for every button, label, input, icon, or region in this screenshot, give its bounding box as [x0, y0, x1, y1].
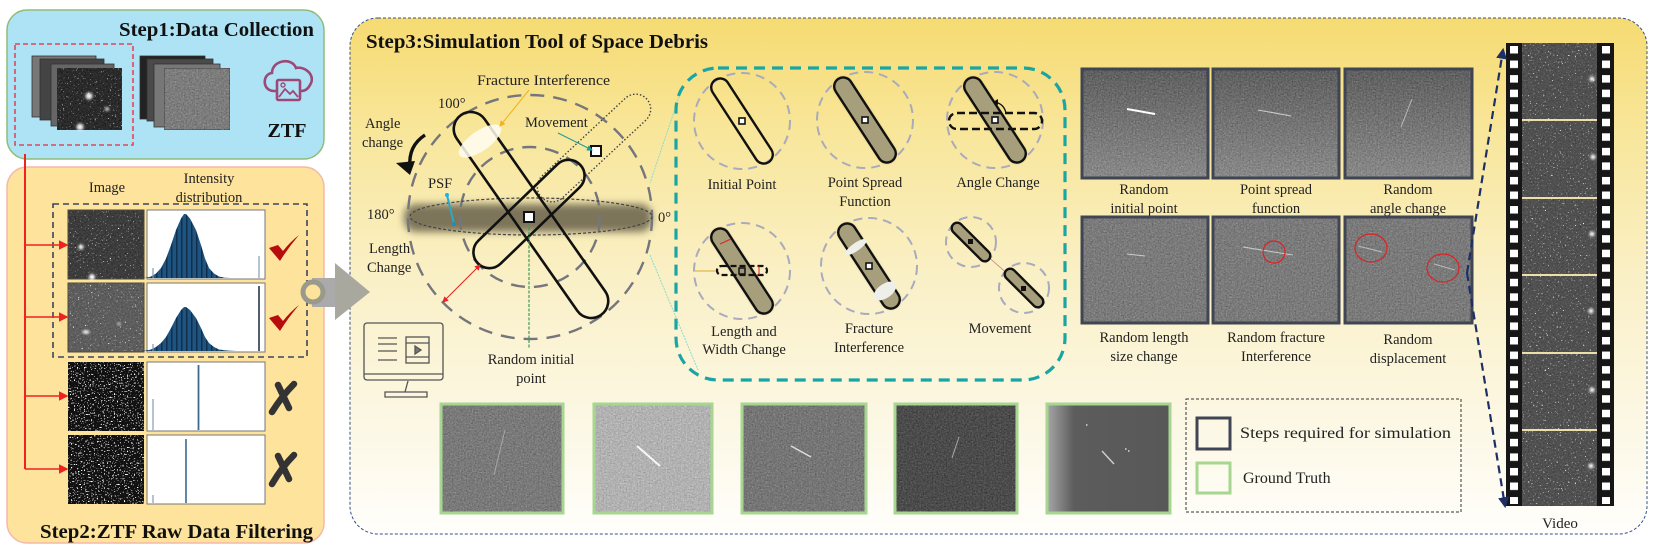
frame dividers [1522, 120, 1597, 430]
image: random length size change: Random length [1099, 330, 1189, 346]
labels: 0° [658, 210, 671, 226]
image stack rejected [140, 56, 230, 130]
PSF blurred band [404, 204, 652, 232]
icon: check 1 [269, 235, 299, 261]
image: random length size change [1082, 217, 1208, 365]
histogram row 3 [147, 362, 265, 431]
panel: step 2 raw data filtering [7, 167, 324, 543]
ground truth image 4 [895, 404, 1017, 513]
arrow: PSF [445, 193, 456, 226]
image: random displacement: Random [1383, 332, 1433, 348]
image: random angle change: angle change [1370, 201, 1446, 217]
ground truth image 1 [441, 404, 563, 513]
labels: 100° [438, 96, 466, 112]
labels: Change [367, 260, 411, 276]
image: random displacement: displacement [1370, 351, 1446, 367]
heading: step 1: Step1:Data Collection [119, 19, 314, 41]
arrow: length change [443, 265, 480, 302]
labels: Angle [365, 116, 400, 132]
panel: step 3 simulation tool [303, 18, 1647, 534]
image: random fracture interference: Interference [1241, 349, 1311, 365]
image: random length size change: size change [1110, 349, 1178, 365]
arrows: red connectors [25, 154, 67, 469]
arrows: expansion to video [1467, 50, 1505, 506]
icon: check 2 [269, 305, 299, 331]
image: point spread function: Point spread [1240, 182, 1313, 198]
column label: intensity distribution: distribution [176, 190, 243, 206]
column label: intensity distribution: Intensity [184, 171, 235, 187]
image: random displacement [1345, 217, 1472, 367]
arrow: angle change [396, 135, 425, 175]
histogram row 2 [141, 283, 265, 352]
short capsule [467, 153, 591, 275]
icon: cross 2 [272, 455, 294, 484]
labels: 180° [367, 207, 395, 223]
heading: step 3: Step3:Simulation Tool of Space Debris [366, 31, 708, 53]
column label: image: Image [89, 180, 125, 196]
detail: fracture interference: Fracture [845, 321, 893, 337]
connector lines to detail box [650, 88, 698, 370]
arrow: fracture [500, 90, 529, 126]
image: random initial point: Random [1119, 182, 1169, 198]
initial point [524, 212, 534, 222]
histogram row 1 [141, 210, 265, 279]
icon: cross 1 [272, 384, 294, 412]
image row 1 [68, 210, 144, 280]
legend swatch: steps [1197, 418, 1230, 449]
labels: point [516, 371, 546, 387]
heading: step 2: Step2:ZTF Raw Data Filtering [40, 521, 313, 543]
detail: initial point: Initial Point [708, 177, 776, 193]
image: point spread function [1213, 69, 1339, 217]
panel: debris parameter details [676, 68, 1065, 380]
film frames [1522, 43, 1597, 506]
image row 2 [68, 283, 144, 352]
legend label: steps: Steps required for simulation [1240, 425, 1451, 442]
detail: point spread function: Point Spread [828, 175, 903, 191]
detail: point spread function [817, 72, 913, 210]
arrow: grey flow from step 2 to step 3 [303, 263, 370, 320]
bright stars [1588, 76, 1596, 468]
selected images dashed frame [53, 204, 307, 357]
histogram row 4 [147, 435, 265, 504]
image: point spread function: function [1252, 201, 1301, 217]
detail: fracture interference: Interference [834, 340, 904, 356]
label: video: Video [1542, 516, 1578, 532]
labels: Random initial [488, 352, 574, 368]
dotted displaced capsule [531, 88, 657, 208]
labels: Length [369, 241, 411, 257]
selection dashed frame [15, 44, 133, 145]
arrow: random initial point [528, 223, 530, 348]
detail: length and width change [694, 223, 790, 358]
image stack selected [32, 56, 122, 130]
detail: length and width change: Length and [711, 324, 778, 340]
ground truth image 5 [1047, 404, 1170, 513]
icon: cloud image [265, 61, 312, 100]
detail: fracture interference [821, 218, 917, 356]
moved point [591, 146, 601, 156]
labels: change [362, 135, 403, 151]
film holes left [1510, 46, 1518, 504]
image: random initial point: initial point [1110, 201, 1178, 217]
long capsule [447, 105, 615, 325]
ground truth image 2 [594, 404, 712, 513]
labels [362, 73, 671, 387]
label: ZTF: ZTF [268, 120, 306, 142]
panel: ground truth images [441, 404, 1170, 513]
legend swatch: ground truth [1197, 463, 1230, 493]
arrow: movement [558, 133, 592, 150]
image: random angle change [1345, 69, 1472, 217]
legend label: ground truth: Ground Truth [1243, 470, 1331, 487]
legend [1186, 399, 1461, 512]
film holes right [1602, 46, 1610, 504]
detail: angle change [947, 72, 1043, 191]
detail: movement: Movement [969, 321, 1031, 337]
detail: movement [946, 217, 1049, 337]
image row 3 [68, 362, 144, 431]
labels: Movement [525, 115, 588, 131]
image: random angle change: Random [1383, 182, 1433, 198]
detail: length and width change: Width Change [702, 342, 786, 358]
detail: initial point [694, 73, 790, 193]
detail: point spread function: Function [839, 194, 892, 210]
panel: simulation step images [1082, 69, 1472, 367]
diagram: debris geometry [362, 73, 671, 387]
panel: step 1 data collection [7, 10, 324, 159]
image: random fracture interference [1213, 217, 1339, 365]
image: random fracture interference: Random fracture [1227, 330, 1325, 346]
detail: angle change: Angle Change [956, 175, 1040, 191]
image row 4 [68, 435, 144, 504]
fracture gap [454, 118, 506, 164]
icon: monitor with video [364, 323, 443, 397]
dashed horizontal capsule [410, 198, 652, 235]
film strip video [1506, 43, 1614, 532]
labels: Fracture Interference [477, 73, 610, 89]
labels: PSF [428, 176, 452, 192]
image: random initial point [1082, 69, 1208, 217]
ground truth image 3 [742, 404, 866, 513]
